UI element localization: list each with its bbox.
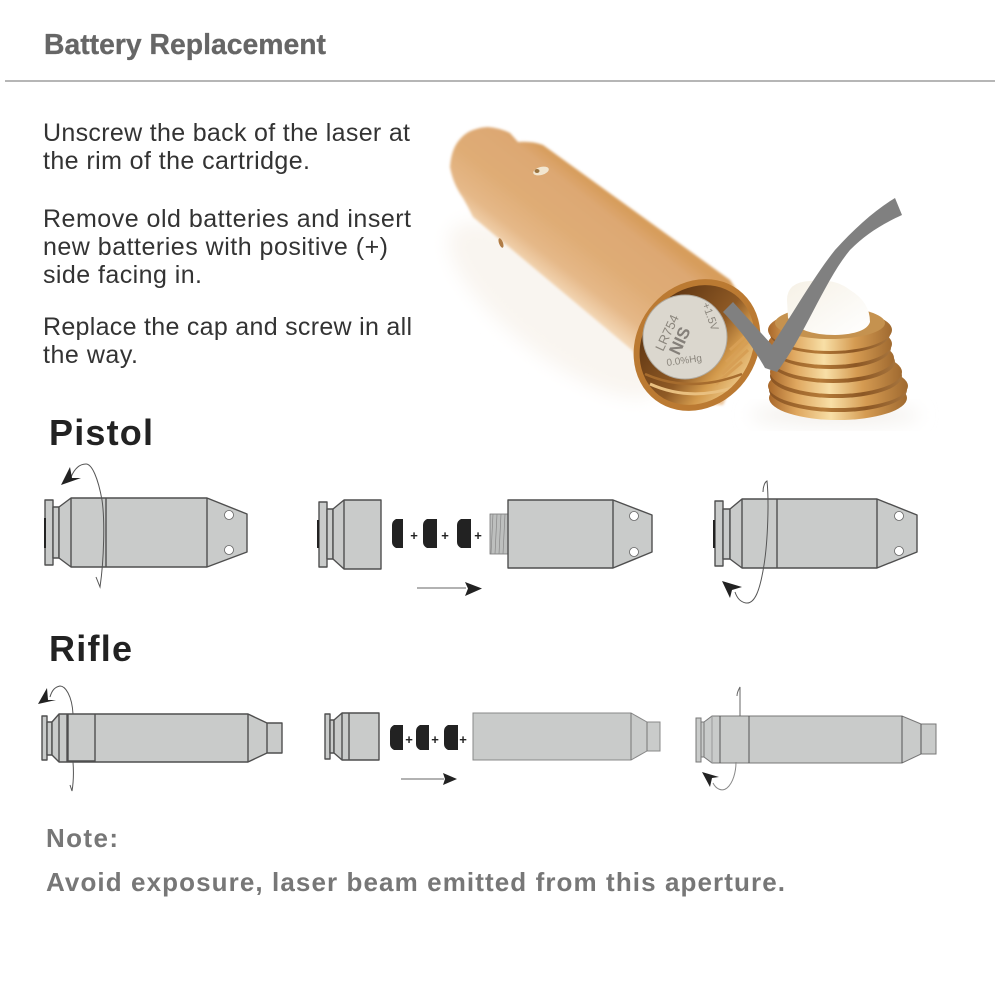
batteries: +: [474, 528, 482, 543]
direction arrow: [401, 778, 444, 780]
cap: [768, 280, 908, 420]
laser aperture: [532, 165, 550, 177]
note text: Avoid exposure, laser beam emitted from this aperture.: [46, 867, 785, 897]
cartridge body: [450, 127, 758, 405]
photo: brass laser cartridge with open cap: [425, 127, 920, 436]
diagram: pistol step 1 unscrew: [44, 464, 247, 587]
instructions text: Remove old batteries and insert: [43, 205, 411, 233]
instructions text: new batteries with positive (+): [43, 233, 388, 261]
title: Battery Replacement: [44, 29, 326, 61]
diagram: rifle step 2 insert batteries: [325, 713, 660, 785]
note heading: Note:: [46, 823, 118, 853]
button battery: NIS: [665, 324, 695, 358]
check mark: [723, 198, 902, 372]
batteries: +: [431, 732, 439, 747]
batteries: +: [459, 732, 467, 747]
instructions text: Unscrew the back of the laser at: [43, 119, 410, 147]
button battery: LR754: [652, 312, 682, 353]
rotation arrow: [737, 687, 740, 716]
diagram: pistol step 2 insert batteries: [317, 500, 652, 596]
button battery: [643, 295, 727, 379]
batteries: +: [405, 732, 413, 747]
instructions text: the rim of the cartridge.: [43, 147, 310, 175]
heading: Pistol: Pistol: [49, 412, 153, 453]
rotation arrow: [735, 481, 768, 603]
rotation arrow: [50, 686, 73, 714]
button battery: +1.5V: [699, 301, 721, 333]
batteries: [392, 519, 482, 548]
rotation arrow: [71, 464, 104, 587]
instructions text: the way.: [43, 341, 138, 369]
instructions text: [43, 119, 412, 369]
diagram: rifle step 3 screw in: [696, 687, 936, 790]
button battery: 0.0%Hg: [666, 353, 703, 369]
white plastic insert: [787, 280, 870, 335]
instructions text: Replace the cap and screw in all: [43, 313, 412, 341]
batteries: +: [410, 528, 418, 543]
batteries: +: [441, 528, 449, 543]
heading: Rifle: Rifle: [49, 628, 132, 669]
instructions text: side facing in.: [43, 261, 202, 289]
cartridge mouth: [608, 254, 786, 436]
diagram: rifle step 1 unscrew: [38, 686, 282, 791]
batteries: [390, 725, 467, 750]
diagram: pistol step 3 screw in: [713, 481, 917, 603]
direction arrow: [417, 587, 466, 589]
